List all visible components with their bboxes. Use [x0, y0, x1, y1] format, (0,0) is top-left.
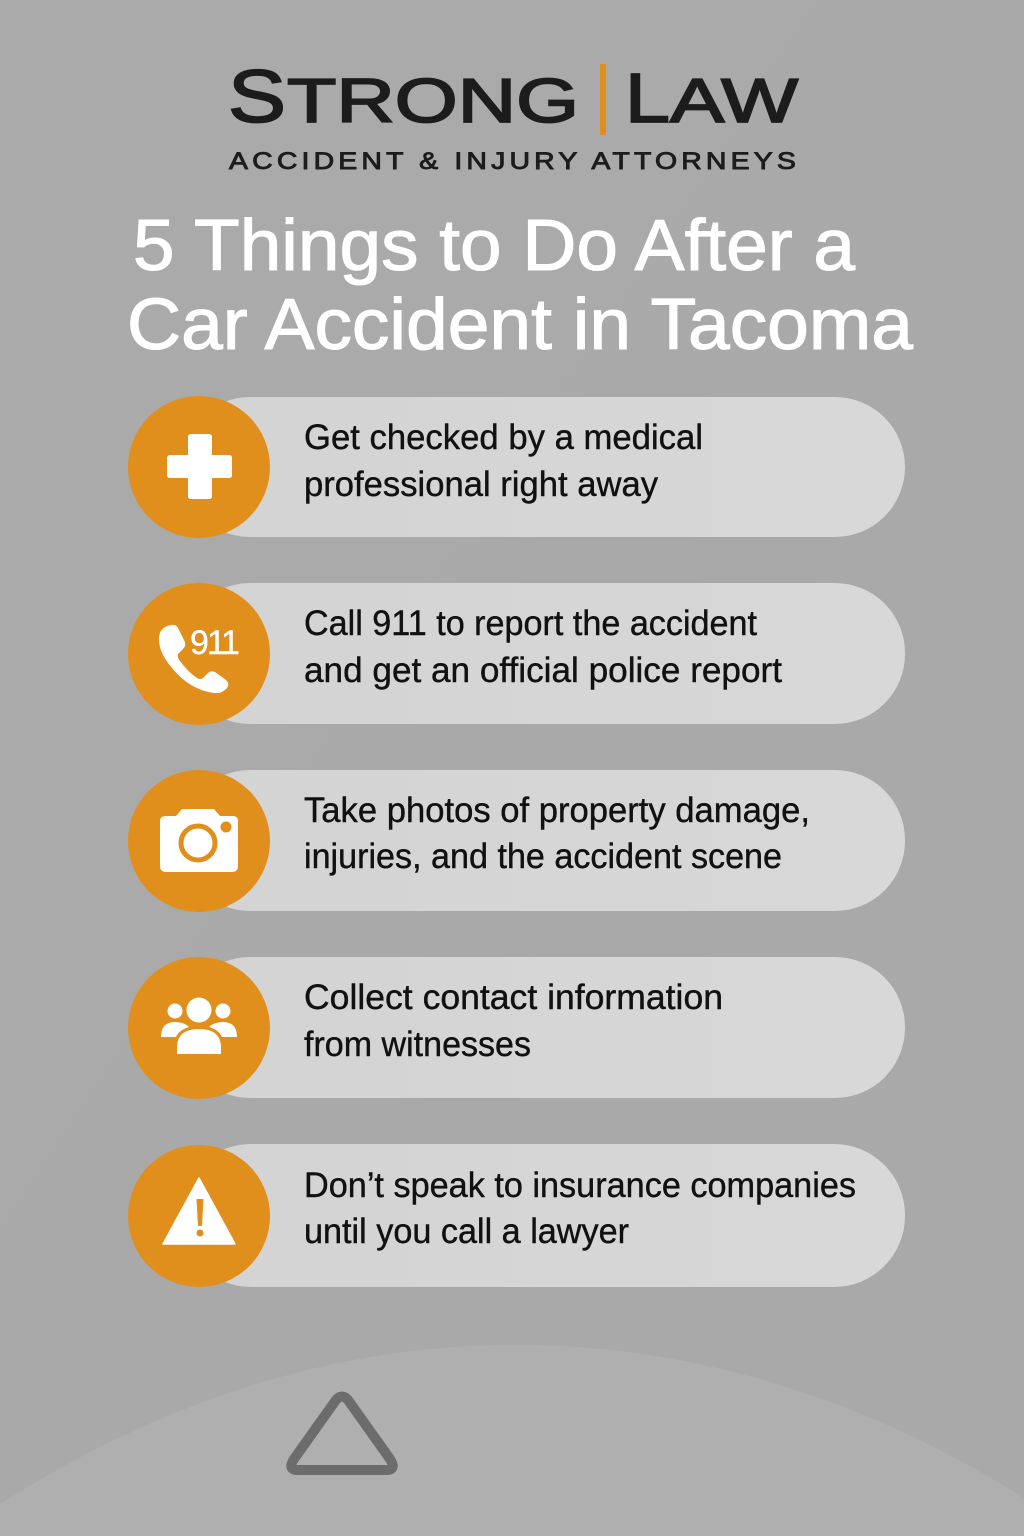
step 1 text: Get checked by a medical [304, 418, 703, 457]
logo wordmark: Law: L [625, 59, 670, 137]
step 4 text: Collect contact information [304, 978, 723, 1017]
step 2 text [304, 604, 782, 690]
step 5 text: Don’t speak to insurance companies [304, 1166, 856, 1205]
outlined triangle [291, 1396, 393, 1470]
logo wordmark: Strong: S [228, 55, 286, 138]
step 1: medical [128, 396, 905, 538]
step 5 text: until you call a lawyer [304, 1212, 629, 1251]
logo divider [600, 64, 606, 135]
title: Car Accident in Tacoma [127, 285, 914, 365]
step 4 text [304, 978, 723, 1064]
step 3 text: Take photos of property damage, [304, 791, 810, 830]
step 3 text [304, 791, 810, 876]
logo wordmark: Strong: TRONG [287, 67, 579, 136]
logo wordmark: Law [625, 59, 799, 137]
step 3 text: injuries, and the accident scene [304, 837, 782, 876]
step 2 panel [180, 583, 905, 724]
icon: camera [128, 770, 270, 912]
logo wordmark: Strong [228, 55, 579, 138]
step 4: witnesses [128, 957, 905, 1099]
bottom curved band [0, 1345, 1024, 1536]
step 3: photos [128, 770, 905, 912]
icon: people group [128, 957, 270, 1099]
logo wordmark: Law: AW [670, 67, 799, 136]
title [127, 206, 914, 365]
title: 5 Things to Do After a [133, 206, 856, 286]
icon: medical cross [128, 396, 270, 538]
step 5: insurance [128, 1144, 905, 1287]
icon: phone 911: 911 [190, 624, 240, 662]
logo [228, 55, 800, 175]
step 1 panel [180, 397, 905, 537]
step 3 panel [180, 770, 905, 911]
step 1 text [304, 418, 703, 504]
icon: phone 911 [128, 583, 270, 725]
step 1 text: professional right away [304, 465, 658, 504]
step 2 text: and get an official police report [304, 651, 782, 690]
icon: warning [128, 1145, 270, 1287]
step 4 text: from witnesses [304, 1025, 531, 1064]
step 2: call 911 [128, 583, 905, 725]
logo tagline: ACCIDENT & INJURY ATTORNEYS [229, 148, 800, 175]
step 5 text [304, 1166, 856, 1251]
step 4 panel [180, 957, 905, 1098]
step 2 text: Call 911 to report the accident [304, 604, 757, 643]
step 5 panel [180, 1144, 905, 1287]
